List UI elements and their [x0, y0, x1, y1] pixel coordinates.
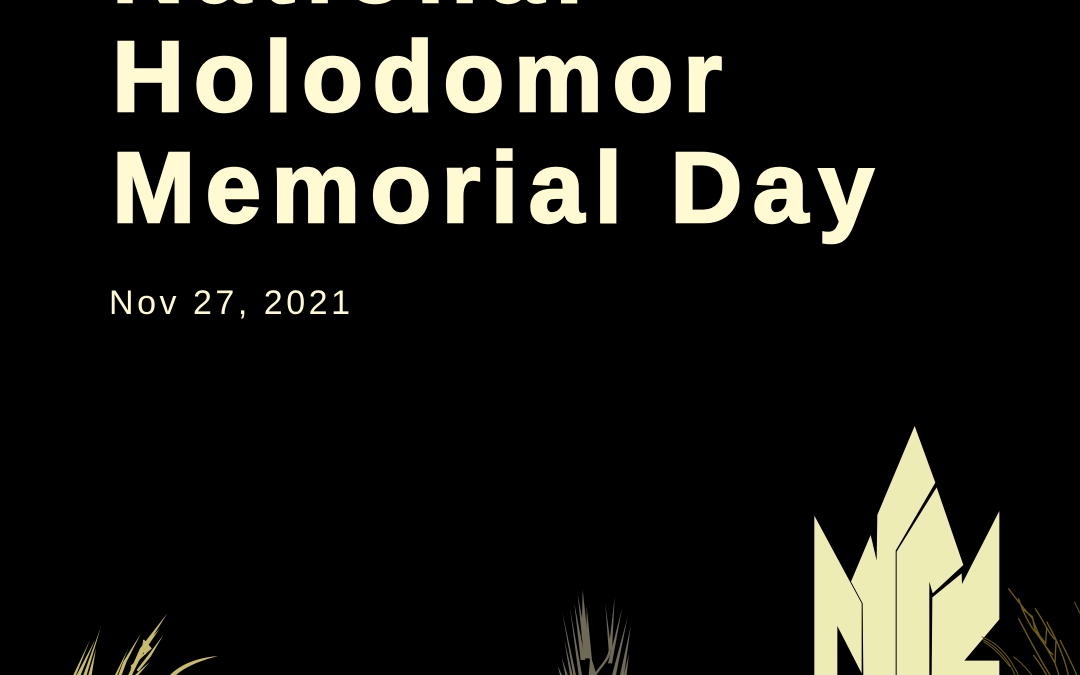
date: Nov 27, 2021 [109, 284, 350, 322]
title [112, 0, 874, 244]
wheat left [73, 613, 167, 675]
title: Memorial Day [112, 132, 874, 244]
wheat left curved stem [170, 656, 218, 675]
wheat center [558, 589, 631, 675]
wheat right [982, 588, 1080, 675]
icon: memorial flame [814, 426, 999, 675]
title: Holodomor [112, 21, 722, 133]
